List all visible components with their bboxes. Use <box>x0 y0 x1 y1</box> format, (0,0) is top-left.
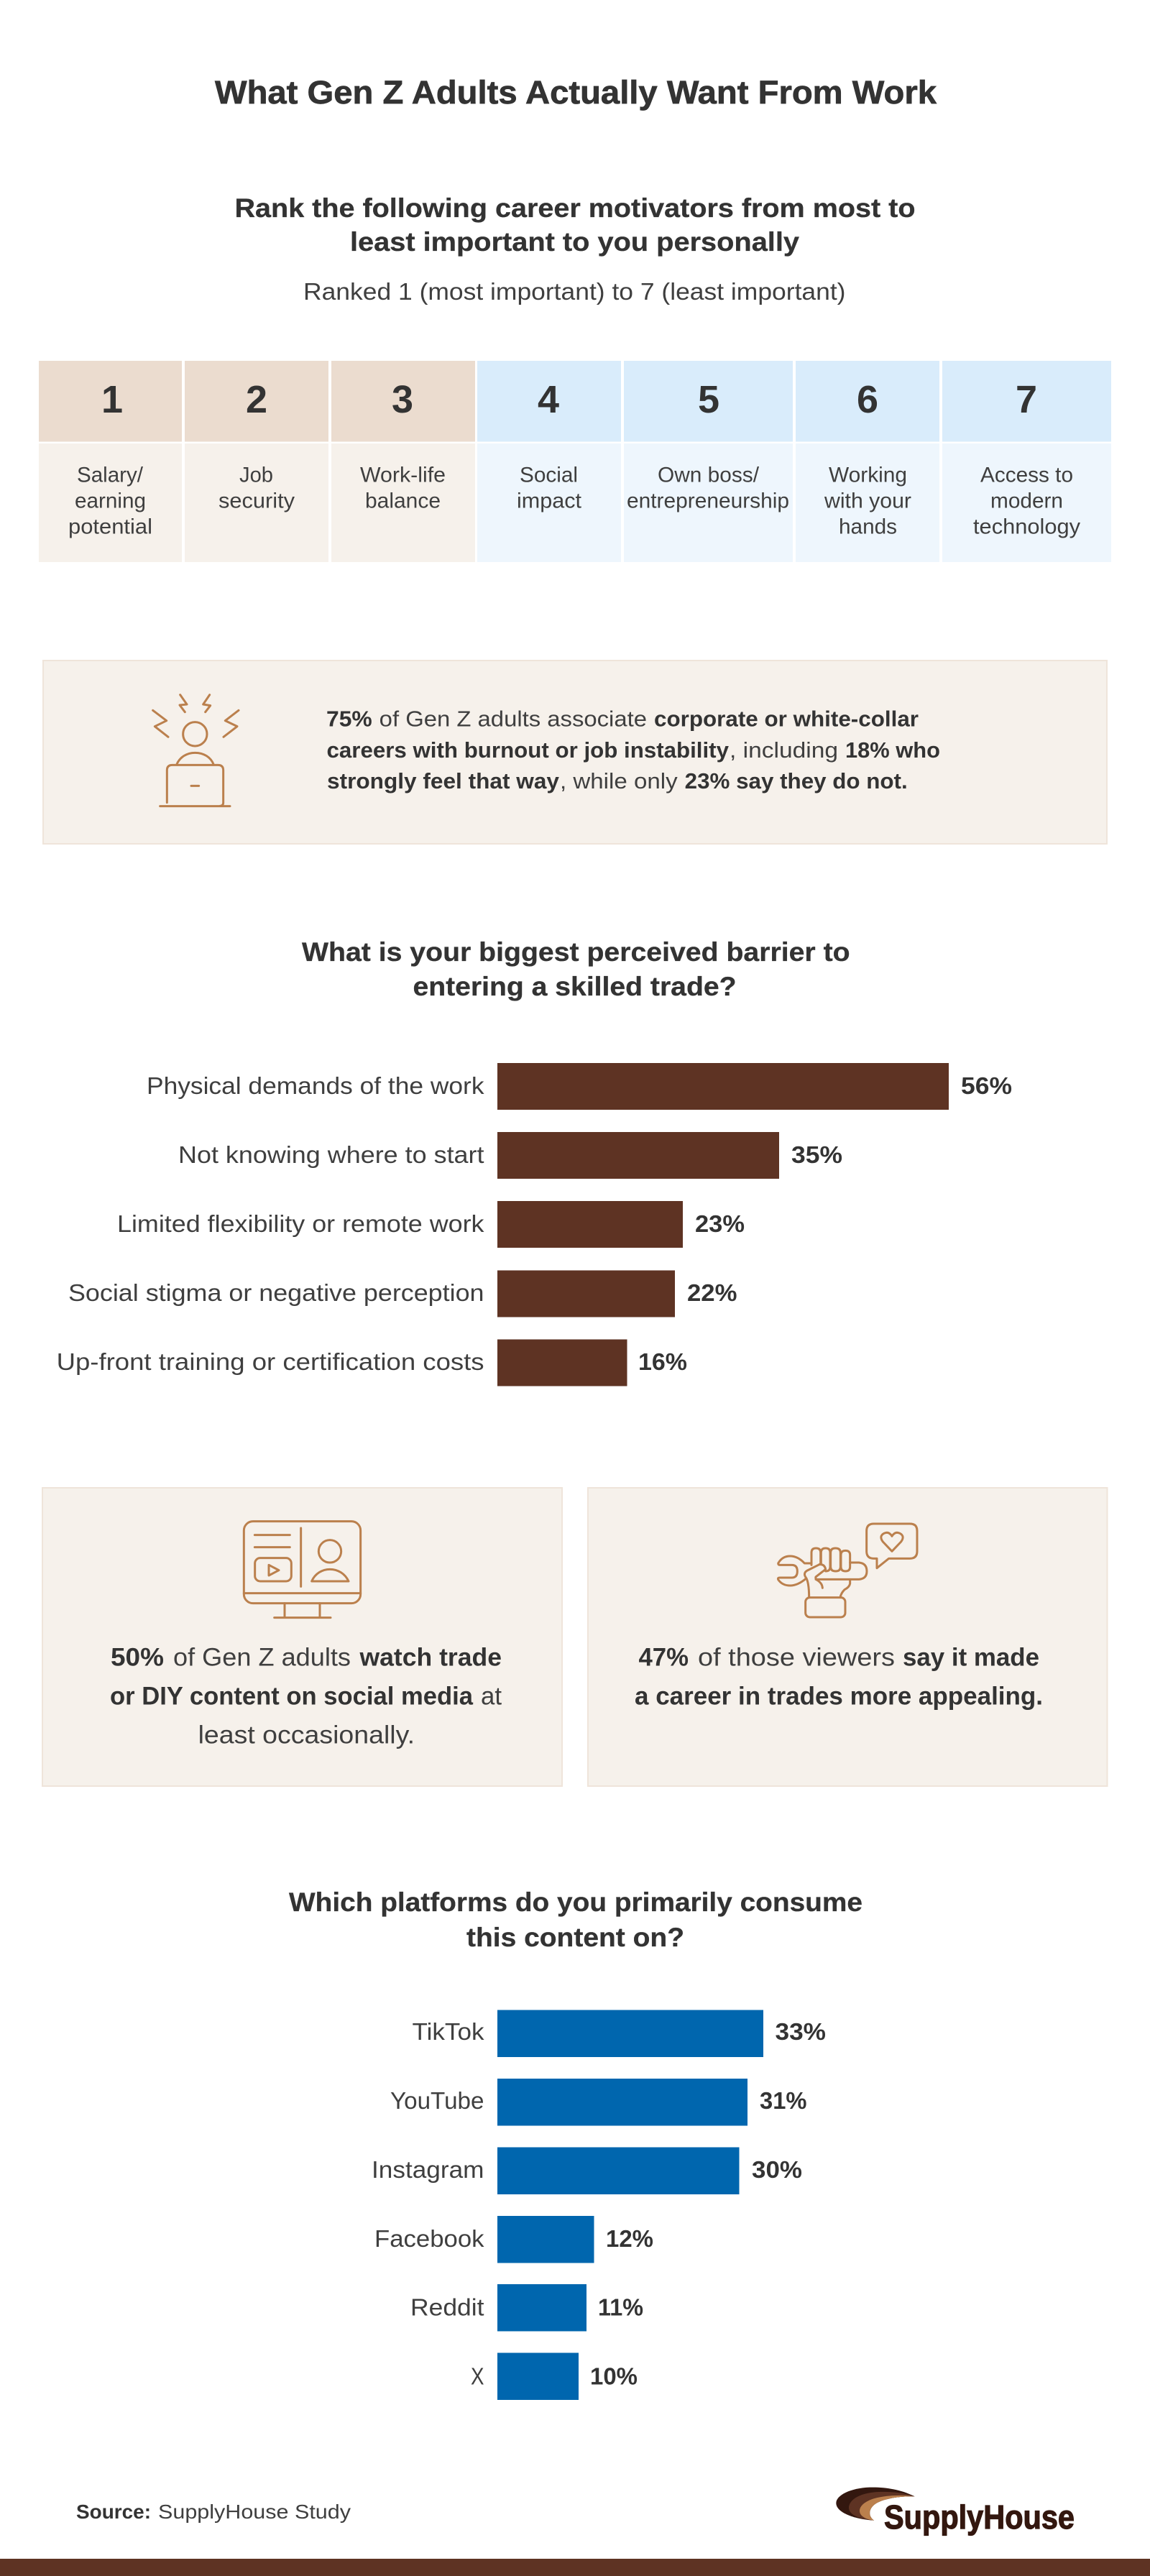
rank 7 column: modern <box>990 489 1063 513</box>
bar: Instagram 30% <box>372 2148 802 2194</box>
rank 5 column: 5 <box>698 378 719 421</box>
rank 6 column: hands <box>839 515 897 539</box>
bar: up-front costs 16%: 16% <box>638 1348 687 1375</box>
callout text: strongly feel that way <box>327 769 559 794</box>
callout text: 75% <box>326 707 372 732</box>
bar chart: barriers <box>57 1063 1012 1386</box>
bar: social stigma 22%: 22% <box>687 1279 737 1306</box>
bar: YouTube 31%: 31% <box>760 2087 806 2114</box>
bar: physical demands 56% <box>147 1063 1012 1110</box>
bar: social stigma 22% <box>68 1271 737 1317</box>
bar: limited flexibility 23%: 23% <box>695 1210 745 1237</box>
bar: up-front costs 16%: Up-front training or certification costs <box>57 1348 484 1375</box>
bar: limited flexibility 23% <box>117 1201 745 1248</box>
bar: X 10%: 10% <box>590 2363 638 2389</box>
rank 1 column: earning <box>75 489 146 513</box>
rank 3 column: balance <box>365 489 441 513</box>
rank 3 column: 3 <box>392 378 413 421</box>
callout text: of Gen Z adults associate <box>380 707 647 732</box>
icon: monitor with video and profile <box>244 1522 361 1618</box>
rank 4 column: impact <box>517 489 582 513</box>
rank 2 column <box>185 361 328 562</box>
heading: barrier question: What is your biggest perceived barrier to <box>302 937 850 967</box>
source note: SupplyHouse Study <box>158 2501 351 2523</box>
rank 7 column: 7 <box>1016 378 1037 421</box>
rank 4 column <box>477 361 621 562</box>
bar: Facebook 12% <box>374 2216 653 2263</box>
panel text: or DIY content on social media <box>110 1682 474 1711</box>
heading: career motivators question <box>234 193 916 257</box>
icon: stressed person at laptop <box>153 695 239 806</box>
subtitle: ranking scale: Ranked 1 (most important) to 7 (least important) <box>303 278 845 305</box>
rank 6 column: 6 <box>857 378 878 421</box>
bar: TikTok 33%: 33% <box>775 2018 826 2045</box>
ranking table <box>39 361 1111 562</box>
callout text: 23% say they do not. <box>685 769 908 794</box>
callout text: careers with burnout or job instability <box>326 738 729 763</box>
heading: platforms question: this content on? <box>466 1923 684 1952</box>
panel: burnout callout <box>43 661 1107 844</box>
panel text: at <box>481 1682 502 1711</box>
bar: Instagram 30%: Instagram <box>372 2156 484 2183</box>
panel text: watch trade <box>359 1643 502 1672</box>
bar: Instagram 30%: 30% <box>752 2156 802 2183</box>
callout text: , while only <box>560 769 678 794</box>
icon: hand holding wrench with heart bubble <box>778 1524 917 1617</box>
bar: Reddit 11%: Reddit <box>410 2294 484 2320</box>
bar: physical demands 56%: 56% <box>961 1072 1012 1099</box>
bar: TikTok 33% <box>413 2010 826 2057</box>
rank 6 column: Working <box>829 463 907 487</box>
callout text: , including <box>730 738 838 763</box>
rank 4 column: Social <box>520 463 578 487</box>
panel text: 50% <box>111 1643 164 1672</box>
logo: SupplyHouse: SupplyHouse <box>884 2498 1075 2536</box>
source note <box>76 2501 351 2523</box>
bar: not knowing where to start 35% <box>178 1132 842 1179</box>
heading: platforms question: Which platforms do you primarily consume <box>289 1887 862 1917</box>
bar: not knowing where to start 35%: 35% <box>791 1141 842 1168</box>
bar: X 10% <box>471 2353 638 2400</box>
bar: social stigma 22%: Social stigma or negative perception <box>68 1279 484 1306</box>
rank 1 column <box>39 361 182 562</box>
bar: limited flexibility 23%: Limited flexibility or remote work <box>117 1210 484 1237</box>
panel text: 47% <box>638 1643 689 1672</box>
bar: Facebook 12%: Facebook <box>374 2225 484 2252</box>
rank 2 column: Job <box>239 463 273 487</box>
rank 3 column <box>331 361 475 562</box>
rank 3 column: Work-life <box>360 463 446 487</box>
rank 2 column: 2 <box>246 378 267 421</box>
bar: Reddit 11% <box>410 2284 643 2332</box>
heading: barrier question: entering a skilled trade? <box>413 972 736 1001</box>
footer bar <box>0 2559 1150 2576</box>
bar: YouTube 31%: YouTube <box>390 2087 484 2114</box>
heading: career motivators question: least important to you personally <box>350 227 799 257</box>
panel text <box>635 1643 1043 1711</box>
panel text: of Gen Z adults <box>173 1643 351 1672</box>
rank 5 column <box>624 361 793 562</box>
rank 1 column: potential <box>68 515 152 539</box>
rank 1 column: 1 <box>101 378 123 421</box>
bar: Reddit 11%: 11% <box>598 2294 643 2320</box>
bar chart: platforms <box>372 2010 826 2400</box>
heading: platforms question <box>289 1887 862 1952</box>
callout text: 18% who <box>845 738 940 763</box>
panel text <box>110 1643 502 1749</box>
panel: 50% watch trade content <box>42 1488 562 1786</box>
bar: TikTok 33%: TikTok <box>413 2018 484 2045</box>
heading: career motivators question: Rank the following career motivators from most to <box>234 193 916 223</box>
rank 6 column <box>796 361 939 562</box>
rank 7 column: Access to <box>980 463 1073 487</box>
panel text: of those viewers <box>698 1643 895 1672</box>
bar: up-front costs 16% <box>57 1340 687 1386</box>
rank 6 column: with your <box>824 489 911 513</box>
rank 7 column <box>942 361 1111 562</box>
rank 4 column: 4 <box>538 378 559 421</box>
panel text: least occasionally. <box>198 1721 415 1749</box>
rank 5 column: Own boss/ <box>658 463 760 487</box>
rank 7 column: technology <box>973 515 1080 539</box>
panel text: a career in trades more appealing. <box>635 1682 1043 1711</box>
bar: not knowing where to start 35%: Not knowing where to start <box>178 1141 484 1168</box>
bar: physical demands 56%: Physical demands of the work <box>147 1072 484 1099</box>
logo: SupplyHouse <box>836 2488 1075 2536</box>
callout text <box>326 707 940 794</box>
panel: 47% found trades more appealing <box>588 1488 1107 1786</box>
source note: Source: <box>76 2501 151 2523</box>
panel text: say it made <box>903 1643 1039 1672</box>
rank 1 column: Salary/ <box>77 463 144 487</box>
bar: YouTube 31% <box>390 2079 806 2126</box>
title: What Gen Z Adults Actually Want From Work <box>215 74 937 111</box>
rank 2 column: security <box>218 489 295 513</box>
bar: X 10%: X <box>471 2363 484 2389</box>
bar: Facebook 12%: 12% <box>606 2225 653 2252</box>
rank 5 column: entrepreneurship <box>627 489 789 513</box>
callout text: corporate or white-collar <box>654 707 919 732</box>
heading: barrier question <box>302 937 850 1001</box>
